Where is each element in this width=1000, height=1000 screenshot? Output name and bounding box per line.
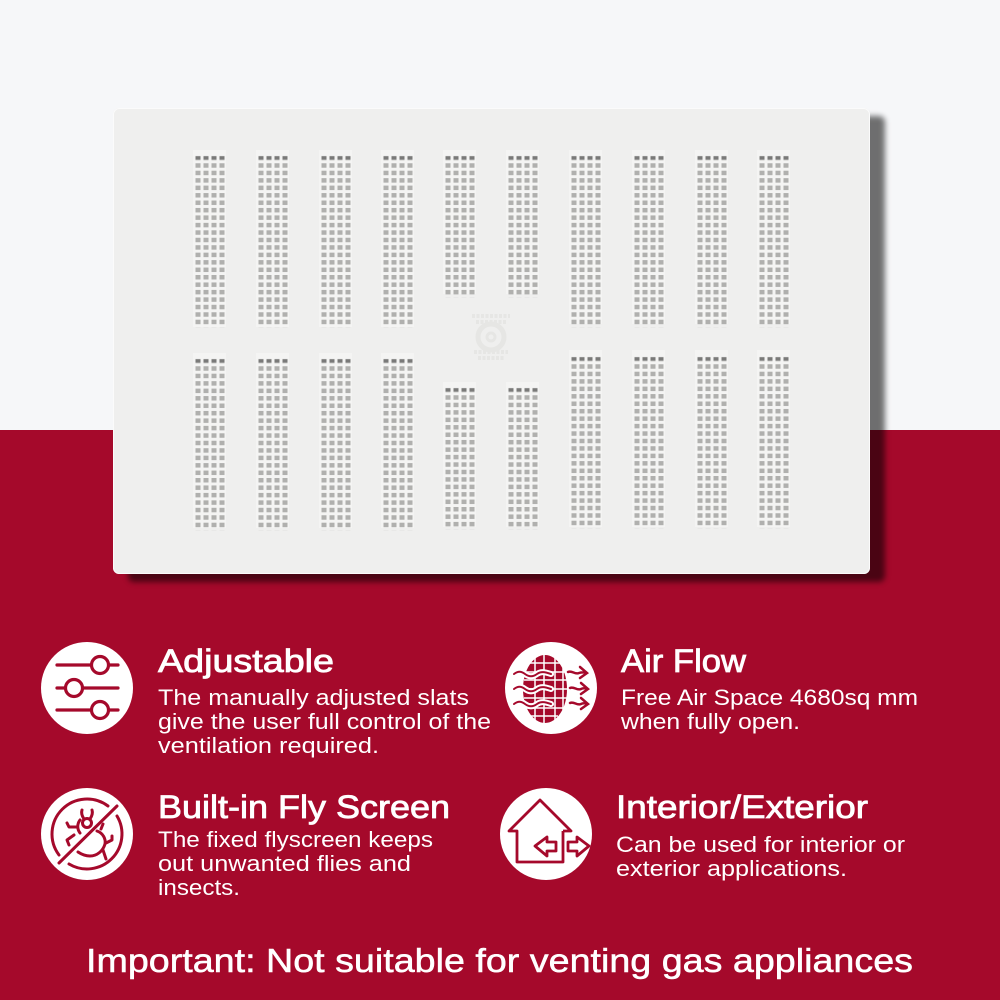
heading: Adjustable: Adjustable: [158, 643, 334, 679]
text: interior exterior description: exterior applications.: [616, 856, 847, 881]
text: adjustable description: [158, 685, 491, 758]
text: fly screen description: [158, 827, 433, 900]
vent plate shadow: [128, 116, 885, 582]
text: fly screen description: The fixed flyscreen keeps: [158, 827, 433, 852]
text: fly screen description: insects.: [158, 875, 240, 900]
warning note: Important: Not suitable for venting gas appliances: [86, 942, 913, 979]
text: air flow description: [620, 685, 918, 734]
icon: air through mesh: [505, 642, 597, 734]
feature: interior exterior: [500, 788, 905, 881]
feature: adjustable: [41, 642, 491, 758]
text: air flow description: when fully open.: [620, 709, 800, 734]
text: adjustable description: ventilation required.: [158, 733, 379, 758]
background: light upper band: [0, 0, 1000, 430]
slat group: bottom row: [193, 350, 790, 530]
text: fly screen description: out unwanted flies and: [158, 851, 411, 876]
feature: fly screen: [41, 788, 450, 900]
slat group: top row: [193, 150, 790, 327]
vent plate: [113, 108, 870, 574]
heading: Air Flow: Air Flow: [621, 643, 747, 679]
text: air flow description: Free Air Space 4680sq mm: [621, 685, 918, 710]
heading: Interior/Exterior: Interior/Exterior: [616, 789, 868, 825]
feature: air flow: [505, 642, 918, 734]
icon: no insects: [41, 788, 133, 880]
text: adjustable description: give the user full control of the: [158, 709, 491, 734]
text: interior exterior description: [616, 832, 905, 881]
heading: Built-in Fly Screen: Built-in Fly Screen: [158, 789, 450, 825]
icon: sliders: [41, 642, 133, 734]
text: adjustable description: The manually adjusted slats: [158, 685, 469, 710]
centre moulded logo: [472, 316, 510, 358]
background: red lower band: [0, 430, 1000, 1000]
icon: house with arrows: [500, 788, 592, 880]
text: interior exterior description: Can be used for interior or: [616, 832, 905, 857]
